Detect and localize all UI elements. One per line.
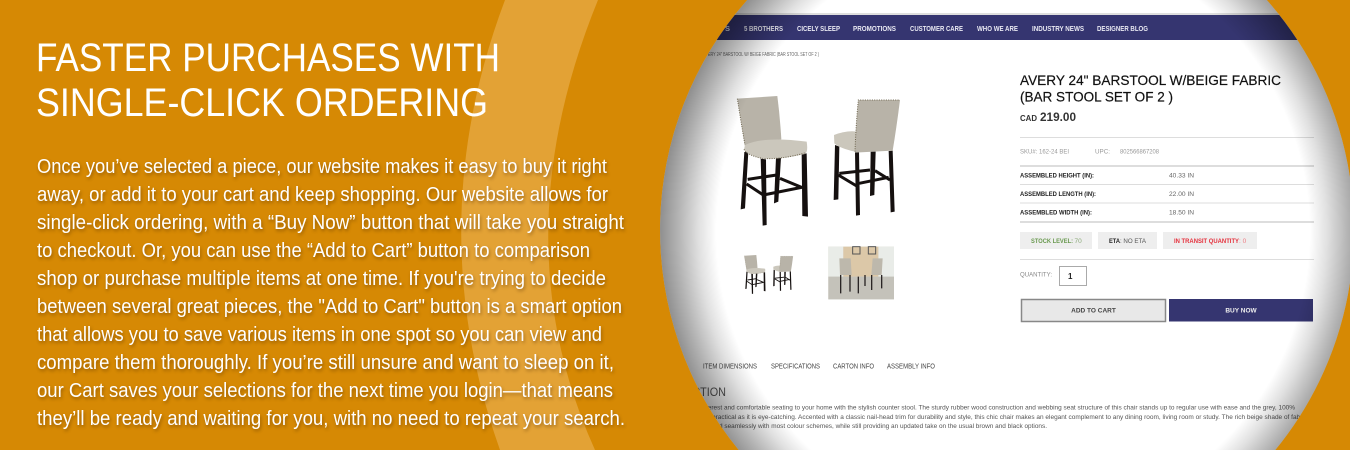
navigation bar: S: [725, 24, 730, 33]
body text block: Once you’ve selected a piece, our website makes it easy to buy it right: [37, 156, 607, 178]
body text block: that allows you to save various items in one spot so you can view and: [37, 324, 602, 346]
product title: (BAR STOOL SET OF 2 ): [1020, 88, 1173, 104]
tabs: [704, 364, 935, 368]
body text block: compare them thoroughly. If you’re still unsure and want to sleep on it,: [37, 352, 614, 374]
button: buy now: [1169, 299, 1313, 322]
stock badges: [1020, 232, 1257, 249]
lens inner shadow: [660, 0, 1350, 450]
navigation bar: CUSTOMER CARE: [910, 24, 963, 33]
description text: d seamlessly with most colour schemes, while still providing an updated take on the usual brown and black options.: [719, 423, 1047, 430]
stock badges: 70: [1074, 238, 1082, 245]
SKU and UPC: [1020, 149, 1159, 154]
button: buy now: BUY NOW: [1225, 308, 1258, 314]
body text block: single-click ordering, with a “Buy Now” button that will take you straight: [37, 212, 624, 234]
SKU and UPC: 802566867208: [1120, 148, 1159, 156]
navigation bar: INDUSTRY NEWS: [1032, 24, 1084, 33]
thumbnail: barstools: [744, 255, 793, 294]
panel: website screenshot lens: [652, 0, 1350, 450]
dimensions table: 18.50 IN: [1169, 210, 1194, 216]
navigation bar: PROMOTIONS: [853, 24, 896, 33]
dimensions table: ASSEMBLED LENGTH (IN):: [1020, 191, 1096, 198]
body text block: they’ll be ready and waiting for you, with no need to repeat your search.: [37, 408, 625, 430]
SKU and UPC: SKU#: 162-24 BEI: [1020, 148, 1069, 156]
body text block: away, or add it to your cart and keep shopping. Our website allows for: [37, 184, 608, 206]
product photo: two barstools: [737, 96, 900, 226]
body text block: shop or purchase multiple items at one time. If you're trying to decide: [37, 268, 606, 290]
quantity selector: 1: [1068, 272, 1073, 281]
navigation bar: CICELY SLEEP: [797, 24, 840, 33]
body text block: between several great pieces, the "Add to Cart" button is a smart option: [37, 296, 622, 318]
dimensions table: 40.33 IN: [1169, 172, 1194, 180]
quantity selector: QUANTITY:: [1020, 272, 1052, 278]
body text block: to checkout. Or, you can use the “Add to Cart” button to comparison: [37, 240, 590, 262]
description text: terest and comfortable seating to your home with the stylish counter stool. The sturdy rubber wood construction and webbing seat structure of this chair stands up to regular use with ease and the grey, 100%: [706, 404, 1295, 412]
stock badges: IN TRANSIT QUANTITY: [1174, 238, 1240, 245]
button: add to cart: [1022, 300, 1166, 322]
navigation bar: 5 BROTHERS: [744, 24, 783, 33]
price: [1020, 112, 1076, 121]
dimensions table: ASSEMBLED HEIGHT (IN):: [1020, 172, 1094, 180]
body text block: [37, 156, 625, 430]
dimensions table: ASSEMBLED WIDTH (IN):: [1020, 210, 1092, 216]
stock badges: ETA: [1109, 238, 1120, 245]
button: add to cart: ADD TO CART: [1071, 308, 1116, 314]
dimensions table: [1020, 165, 1314, 223]
stock badges: STOCK LEVEL:: [1031, 238, 1073, 245]
quantity selector: [1020, 266, 1086, 286]
tabs: ASSEMBLY INFO: [887, 364, 935, 370]
navigation bar: DESIGNER BLOG: [1097, 24, 1148, 33]
thumbnail: room scene: [828, 247, 894, 299]
SKU and UPC: UPC:: [1095, 148, 1110, 156]
description text: [706, 404, 1308, 430]
decorative light arc band: [461, 0, 598, 450]
title: SINGLE-CLICK ORDERING: [36, 81, 488, 125]
stock badges: : 0: [1239, 238, 1247, 245]
description heading: DESCRIPTION: [652, 385, 726, 399]
product title: [1020, 72, 1281, 104]
product title: AVERY 24" BARSTOOL W/BEIGE FABRIC: [1020, 72, 1281, 88]
tabs: SPECIFICATIONS: [771, 364, 820, 370]
stock badges: : NO ETA: [1120, 238, 1147, 245]
tabs: ITEM DIMENSIONS: [703, 364, 757, 370]
dimensions table: 22.00 IN: [1169, 191, 1194, 198]
navigation bar: [716, 15, 1298, 40]
title: [36, 36, 500, 125]
body text block: our Cart saves your selections for the next time you login—that means: [37, 380, 613, 402]
breadcrumb: ERY 24" BARSTOOL W/ BEIGE FABRIC (BAR STOOL SET OF 2 ): [708, 52, 819, 58]
tabs: CARTON INFO: [833, 364, 874, 370]
title: FASTER PURCHASES WITH: [36, 36, 500, 80]
navigation bar: WHO WE ARE: [977, 24, 1018, 33]
price: 219.00: [1040, 110, 1076, 124]
description text: practical as it is eye-catching. Accented with a classic nail-head trim for durability and style, this chic chair makes an elegant complement to any dining room, living room or study. The rich beige shade of fabric: [712, 414, 1308, 421]
price: CAD: [1020, 114, 1037, 123]
